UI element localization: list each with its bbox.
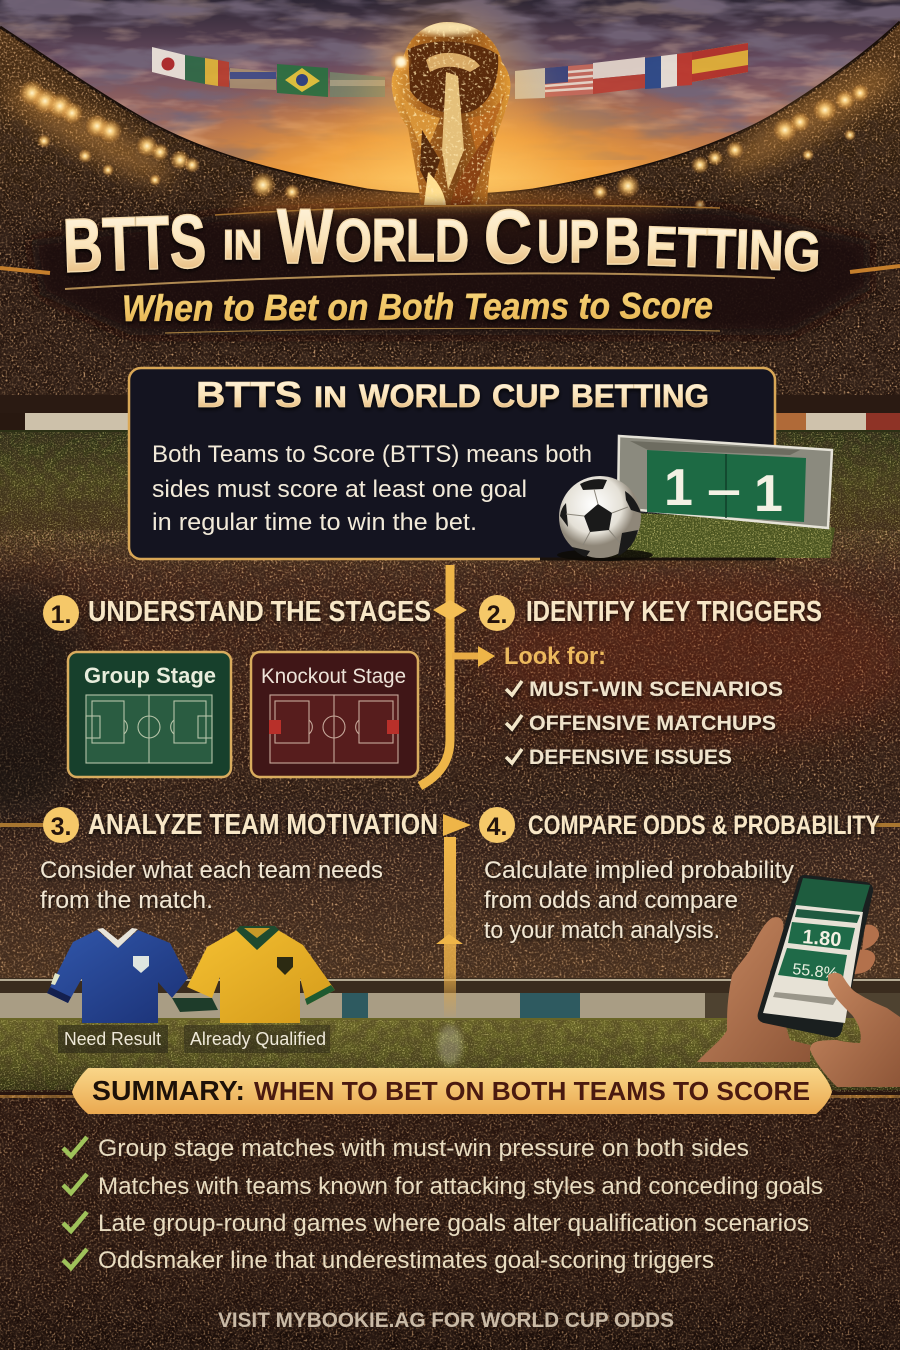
number badge 1 — [43, 595, 79, 631]
step 3: analyze team motivation — [40, 807, 442, 1053]
odds text — [484, 857, 794, 944]
score: – — [707, 463, 741, 515]
number badge 3: 3. — [51, 813, 71, 841]
motivation text: from the match. — [40, 887, 213, 914]
definition text: in regular time to win the bet. — [152, 509, 477, 536]
connector line: upper — [420, 565, 495, 786]
main title — [62, 192, 822, 289]
label: already qualified: Already Qualified — [190, 1029, 326, 1049]
main title: ETTING — [645, 214, 822, 283]
step 2: identify key triggers — [479, 595, 860, 769]
panel heading: IN — [314, 381, 347, 414]
card: group stage — [68, 652, 231, 777]
phone — [758, 875, 873, 1037]
trigger list: DEFENSIVE ISSUES — [529, 745, 732, 769]
summary banner — [72, 1068, 832, 1114]
motivation text: Consider what each team needs — [40, 857, 383, 884]
icon: golden trophy — [365, 15, 535, 210]
step 1: understand the stages — [43, 595, 445, 777]
panel heading — [196, 374, 709, 415]
summary checklist: Matches with teams known for attacking styles and conceding goals — [98, 1173, 823, 1200]
summary banner: SUMMARY: — [92, 1075, 245, 1106]
panel heading: CUP — [492, 378, 560, 414]
main title: B — [604, 204, 641, 278]
heading 3: ANALYZE TEAM MOTIVATION — [88, 809, 438, 841]
phone: 1.80 — [802, 926, 842, 951]
icon: hands holding phone — [697, 875, 900, 1087]
trigger list: MUST-WIN SCENARIOS — [529, 677, 783, 701]
number badge 2: 2. — [487, 601, 507, 629]
title banner — [0, 192, 900, 335]
odds text: Calculate implied probability — [484, 857, 794, 884]
main title: ORLD — [335, 207, 469, 274]
heading 1: UNDERSTAND THE STAGES — [88, 596, 431, 628]
pitch diagram — [86, 695, 212, 763]
icon: soccer ball — [540, 476, 776, 561]
main title: UP — [537, 208, 599, 275]
number badge 4 — [479, 807, 515, 843]
main title: C — [484, 195, 532, 280]
pitch diagram — [270, 695, 398, 763]
label: need result: Need Result — [64, 1029, 161, 1049]
number badge 3 — [43, 807, 79, 843]
definition text — [152, 441, 592, 536]
panel: BTTS definition — [129, 368, 775, 559]
main title: W — [277, 192, 333, 280]
card: group stage: Group Stage — [84, 663, 216, 688]
summary checklist: Oddsmaker line that underestimates goal-scoring triggers — [98, 1247, 714, 1274]
number badge 1: 1. — [51, 601, 71, 629]
summary checklist — [63, 1135, 823, 1274]
phone: 55.8% — [792, 961, 838, 983]
score: 1 — [754, 465, 783, 523]
look for label: Look for: — [504, 643, 606, 670]
main title: BTTS — [62, 199, 208, 289]
definition text: Both Teams to Score (BTTS) means both — [152, 441, 592, 468]
icon: blue jersey — [47, 928, 188, 1023]
card: knockout stage: Knockout Stage — [261, 665, 406, 688]
card: knockout stage — [251, 652, 418, 777]
panel heading: BTTS — [196, 374, 302, 415]
score — [664, 459, 783, 523]
footer call to action: VISIT MYBOOKIE.AG FOR WORLD CUP ODDS — [218, 1309, 674, 1332]
panel heading: BETTING — [571, 378, 709, 414]
trigger list — [506, 677, 783, 769]
label: already qualified — [184, 1025, 330, 1053]
step 4: compare odds and probability — [479, 807, 880, 944]
summary banner: WHEN TO BET ON BOTH TEAMS TO SCORE — [254, 1076, 810, 1106]
label: need result — [58, 1025, 168, 1053]
main title: IN — [223, 221, 262, 268]
flags row — [152, 43, 748, 99]
summary checklist: Group stage matches with must-win pressure on both sides — [98, 1135, 749, 1162]
score: 1 — [664, 459, 693, 517]
summary checklist: Late group-round games where goals alter qualification scenarios — [98, 1210, 809, 1237]
connector line: lower — [0, 814, 900, 1065]
odds text: to your match analysis. — [484, 917, 720, 944]
panel heading: WORLD — [359, 378, 481, 414]
icon: yellow jersey — [172, 926, 335, 1023]
goal with 1-1 score — [590, 436, 835, 558]
number badge 2 — [479, 595, 515, 631]
definition text: sides must score at least one goal — [152, 476, 527, 503]
motivation text — [40, 857, 383, 914]
subtitle: When to Bet on Both Teams to Score — [122, 285, 713, 329]
heading 2: IDENTIFY KEY TRIGGERS — [526, 596, 822, 628]
trigger list: OFFENSIVE MATCHUPS — [529, 711, 776, 735]
odds text: from odds and compare — [484, 887, 738, 914]
number badge 4: 4. — [487, 813, 507, 841]
